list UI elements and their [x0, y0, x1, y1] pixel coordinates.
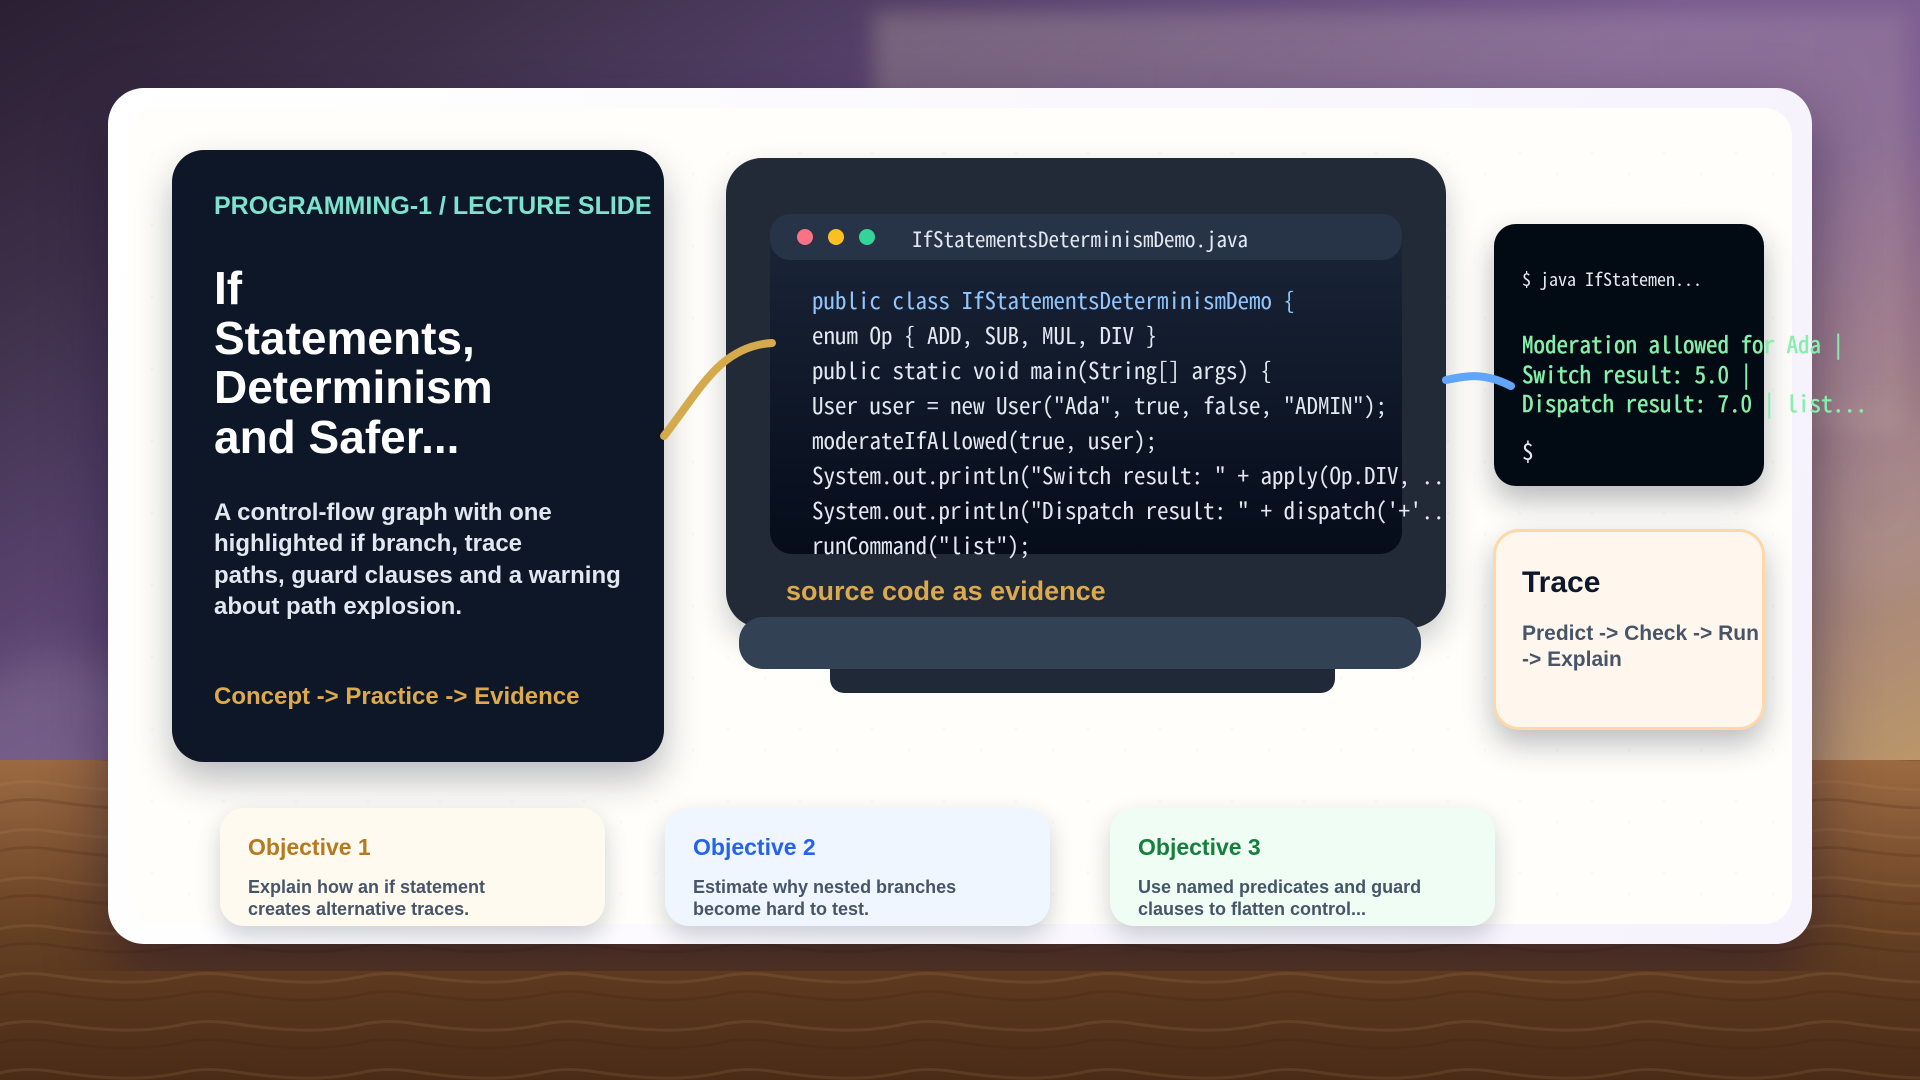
trace heading: Trace	[1522, 566, 1600, 599]
heading: If	[214, 262, 242, 314]
text: public class IfStatementsDeterminismDemo {	[812, 282, 1295, 316]
objective 3 text: Use named predicates and guard	[1138, 877, 1421, 897]
text: enum Op { ADD, SUB, MUL, DIV }	[812, 317, 1157, 351]
objective 1 text: Explain how an if statement	[248, 877, 485, 897]
description: paths, guard clauses and a warning	[214, 562, 621, 589]
objective 2 text: become hard to test.	[693, 899, 869, 919]
terminal output: Moderation allowed for Ada | Switch result: 5.0 | Dispatch result: 7.0 | list...	[1522, 326, 1867, 419]
file name: IfStatementsDeterminismDemo.java	[912, 224, 1248, 254]
objective 1 text: creates alternative traces.	[248, 899, 469, 919]
terminal command: $ java IfStatemen...	[1522, 266, 1702, 292]
laptop body	[726, 158, 1446, 628]
text: moderateIfAllowed(true, user);	[812, 422, 1157, 456]
heading: and Safer...	[214, 411, 459, 463]
text: runCommand("list");	[812, 527, 1030, 561]
text: public static void main(String[] args) {	[812, 352, 1272, 386]
trace text: Predict -> Check -> Run	[1522, 622, 1759, 645]
terminal prompt: $	[1522, 433, 1534, 467]
code editor screen	[770, 214, 1402, 554]
objective card 3	[1110, 808, 1495, 926]
objective 2 text: Estimate why nested branches	[693, 877, 956, 897]
description: about path explosion.	[214, 593, 462, 620]
objective card 2	[665, 808, 1050, 926]
objective 2 title: Objective 2	[693, 834, 816, 860]
text: System.out.println("Switch result: " + apply(Op.DIV, ..	[812, 457, 1444, 491]
heading	[214, 262, 493, 463]
laptop base	[739, 617, 1421, 669]
trace text	[1522, 622, 1759, 671]
objective 2 text	[693, 877, 956, 919]
description: A control-flow graph with one	[214, 499, 552, 526]
panel: trace	[1493, 529, 1765, 730]
objective 1 text	[248, 877, 485, 919]
heading: Determinism	[214, 361, 493, 413]
objective 3 text	[1138, 877, 1421, 919]
editor title bar	[770, 214, 1402, 260]
window dots	[797, 229, 813, 245]
description	[214, 499, 621, 620]
code caption: source code as evidence	[786, 576, 1106, 606]
text: User user = new User("Ada", true, false, "ADMIN");	[812, 387, 1387, 421]
laptop stand foot	[830, 660, 1335, 693]
panel: title card	[172, 150, 664, 762]
eyebrow: PROGRAMMING-1 / LECTURE SLIDE	[214, 192, 652, 220]
heading: Statements,	[214, 312, 475, 364]
slide frame	[108, 88, 1812, 944]
description: highlighted if branch, trace	[214, 530, 522, 557]
objective 1 title: Objective 1	[248, 834, 371, 860]
objective 3 text: clauses to flatten control...	[1138, 899, 1366, 919]
objective card 1	[220, 808, 605, 926]
tagline: Concept -> Practice -> Evidence	[214, 683, 579, 710]
objective 3 title: Objective 3	[1138, 834, 1261, 860]
code listing	[812, 282, 1444, 561]
text: System.out.println("Dispatch result: " + dispatch('+'..	[812, 492, 1444, 526]
trace text: -> Explain	[1522, 648, 1622, 671]
slide paper	[128, 108, 1792, 924]
panel: terminal	[1494, 224, 1764, 486]
